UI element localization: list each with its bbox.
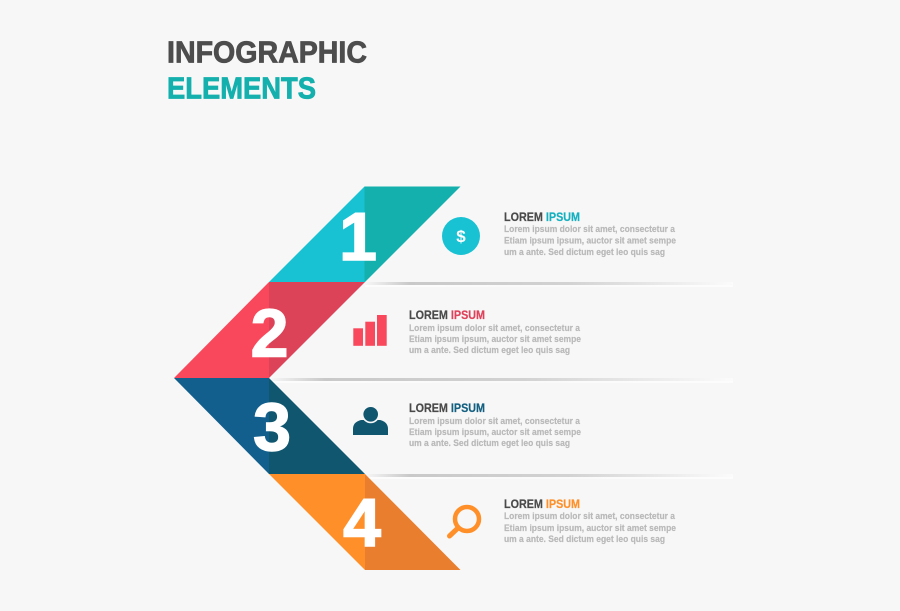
text block 3: LOREM IPSUM [409,403,485,415]
text block 2: LOREM IPSUM [409,310,485,322]
text block 4 [504,499,676,544]
divider shadows [269,282,733,479]
text block 4: Lorem ipsum dolor sit amet, consectetur a [504,511,676,521]
icon: dollar: $ [456,227,466,246]
band 2: red [174,282,365,378]
text block 3 [409,403,581,448]
text block 1 [504,212,676,257]
icon: dollar [442,217,480,255]
band 1: teal [269,186,460,282]
text block 4: Etiam ipsum ipsum, auctor sit amet sempe [504,523,676,533]
text block 1: Lorem ipsum dolor sit amet, consectetur a [504,224,676,234]
text block 2: Lorem ipsum dolor sit amet, consectetur a [409,323,581,333]
text block 3: Lorem ipsum dolor sit amet, consectetur a [409,416,581,426]
text block 1: LOREM IPSUM [504,212,580,224]
band 4: orange [269,474,460,570]
icon: bar chart [353,315,387,346]
icon: magnifier [450,507,479,536]
icon: person [353,405,388,435]
text block 3: um a ante. Sed dictum eget leo quis sag [409,438,570,448]
title [167,34,367,106]
text block 1: um a ante. Sed dictum eget leo quis sag [504,247,665,257]
number 3: 3 [253,389,291,465]
number 2: 2 [251,296,288,372]
text block 2 [409,310,581,355]
number 4: 4 [343,485,381,561]
text block 3: Etiam ipsum ipsum, auctor sit amet sempe [409,427,581,437]
title: INFOGRAPHIC [167,34,367,70]
text block 2: Etiam ipsum ipsum, auctor sit amet sempe [409,334,581,344]
number 1: 1 [339,199,377,275]
text block 4: um a ante. Sed dictum eget leo quis sag [504,534,665,544]
text block 2: um a ante. Sed dictum eget leo quis sag [409,345,570,355]
text block 1: Etiam ipsum ipsum, auctor sit amet sempe [504,236,676,246]
text block 4: LOREM IPSUM [504,499,580,511]
title: ELEMENTS [167,70,316,106]
band 3: blue [174,378,365,474]
